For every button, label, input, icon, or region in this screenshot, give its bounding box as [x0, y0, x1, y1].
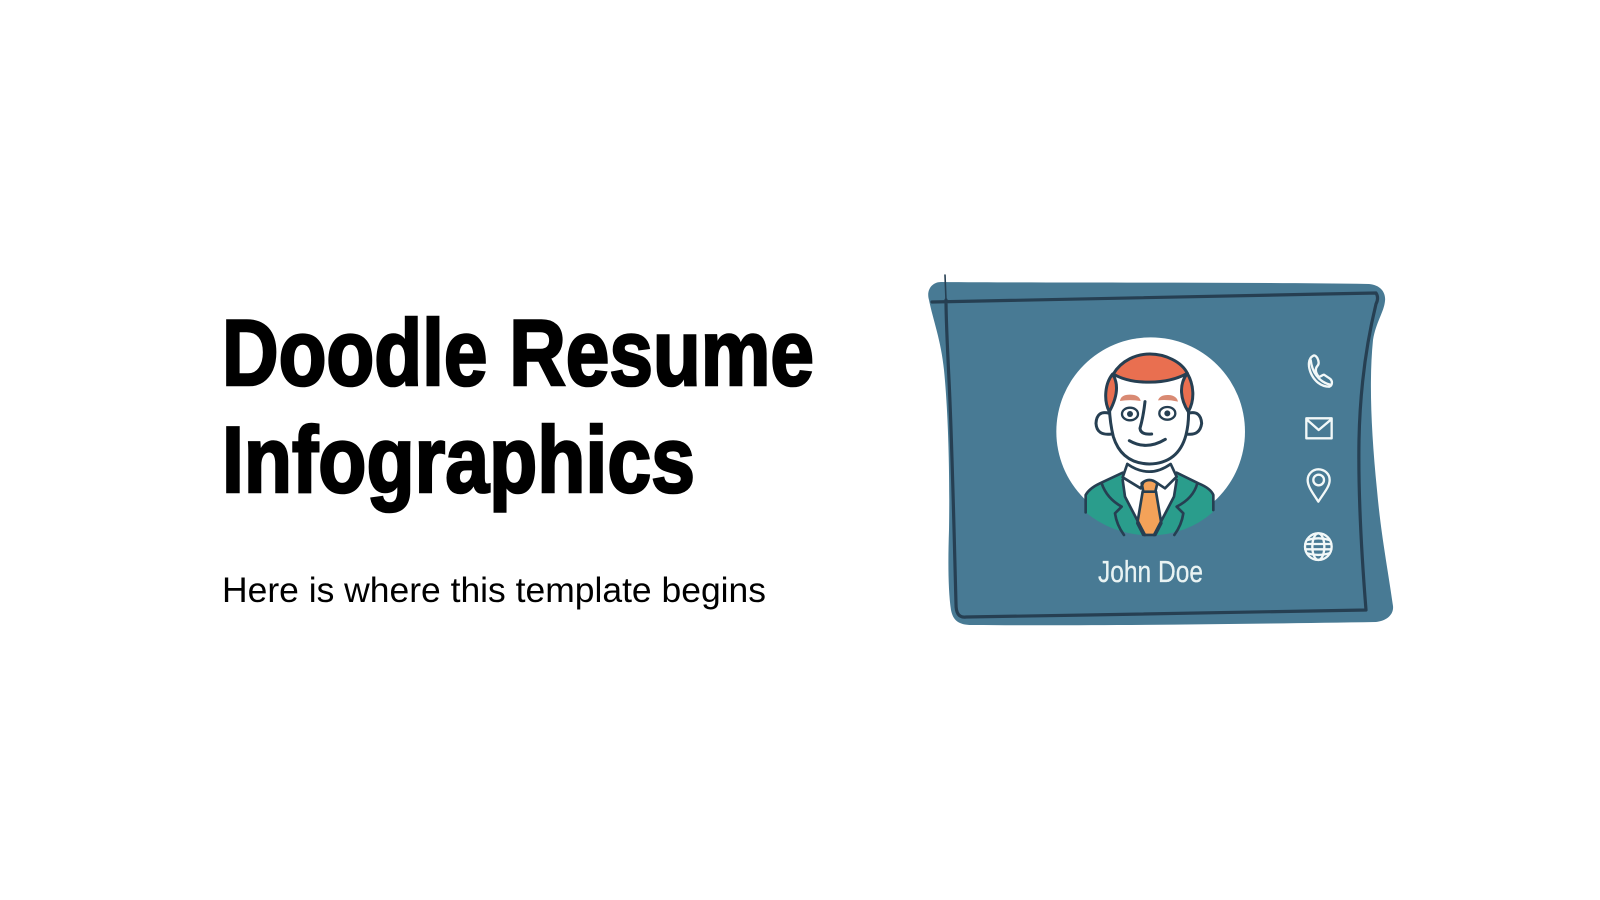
icon: globe: [1305, 533, 1332, 560]
shirt: [1123, 463, 1177, 535]
icon: location pin: [1308, 469, 1330, 502]
resume card: [928, 275, 1393, 625]
eyes: [1122, 407, 1175, 420]
icon: phone: [1309, 355, 1332, 387]
ears: [1096, 413, 1202, 434]
hair: [1113, 354, 1187, 382]
title: Doodle Resume: [222, 300, 814, 405]
tie: [1137, 492, 1161, 535]
contact icons: [1305, 355, 1332, 560]
pupils: [1127, 410, 1170, 417]
title: Infographics: [222, 407, 695, 512]
face: [1109, 377, 1189, 464]
white circle: [1056, 337, 1245, 526]
portrait: [1056, 337, 1245, 535]
card background blob: [928, 282, 1393, 625]
title: [222, 300, 814, 512]
subtitle: Here is where this template begins: [222, 571, 766, 610]
nose and mouth: [1129, 402, 1165, 445]
right sideburn: [1182, 373, 1193, 412]
eyebrows: [1120, 395, 1178, 402]
tie knot: [1142, 480, 1157, 492]
icon: envelope: [1306, 418, 1332, 438]
hand-drawn outline: [932, 275, 1378, 617]
name label: John Doe: [1098, 554, 1203, 589]
suit lines: [1086, 464, 1213, 535]
left sideburn: [1106, 374, 1116, 412]
suit jacket: [1086, 473, 1213, 535]
